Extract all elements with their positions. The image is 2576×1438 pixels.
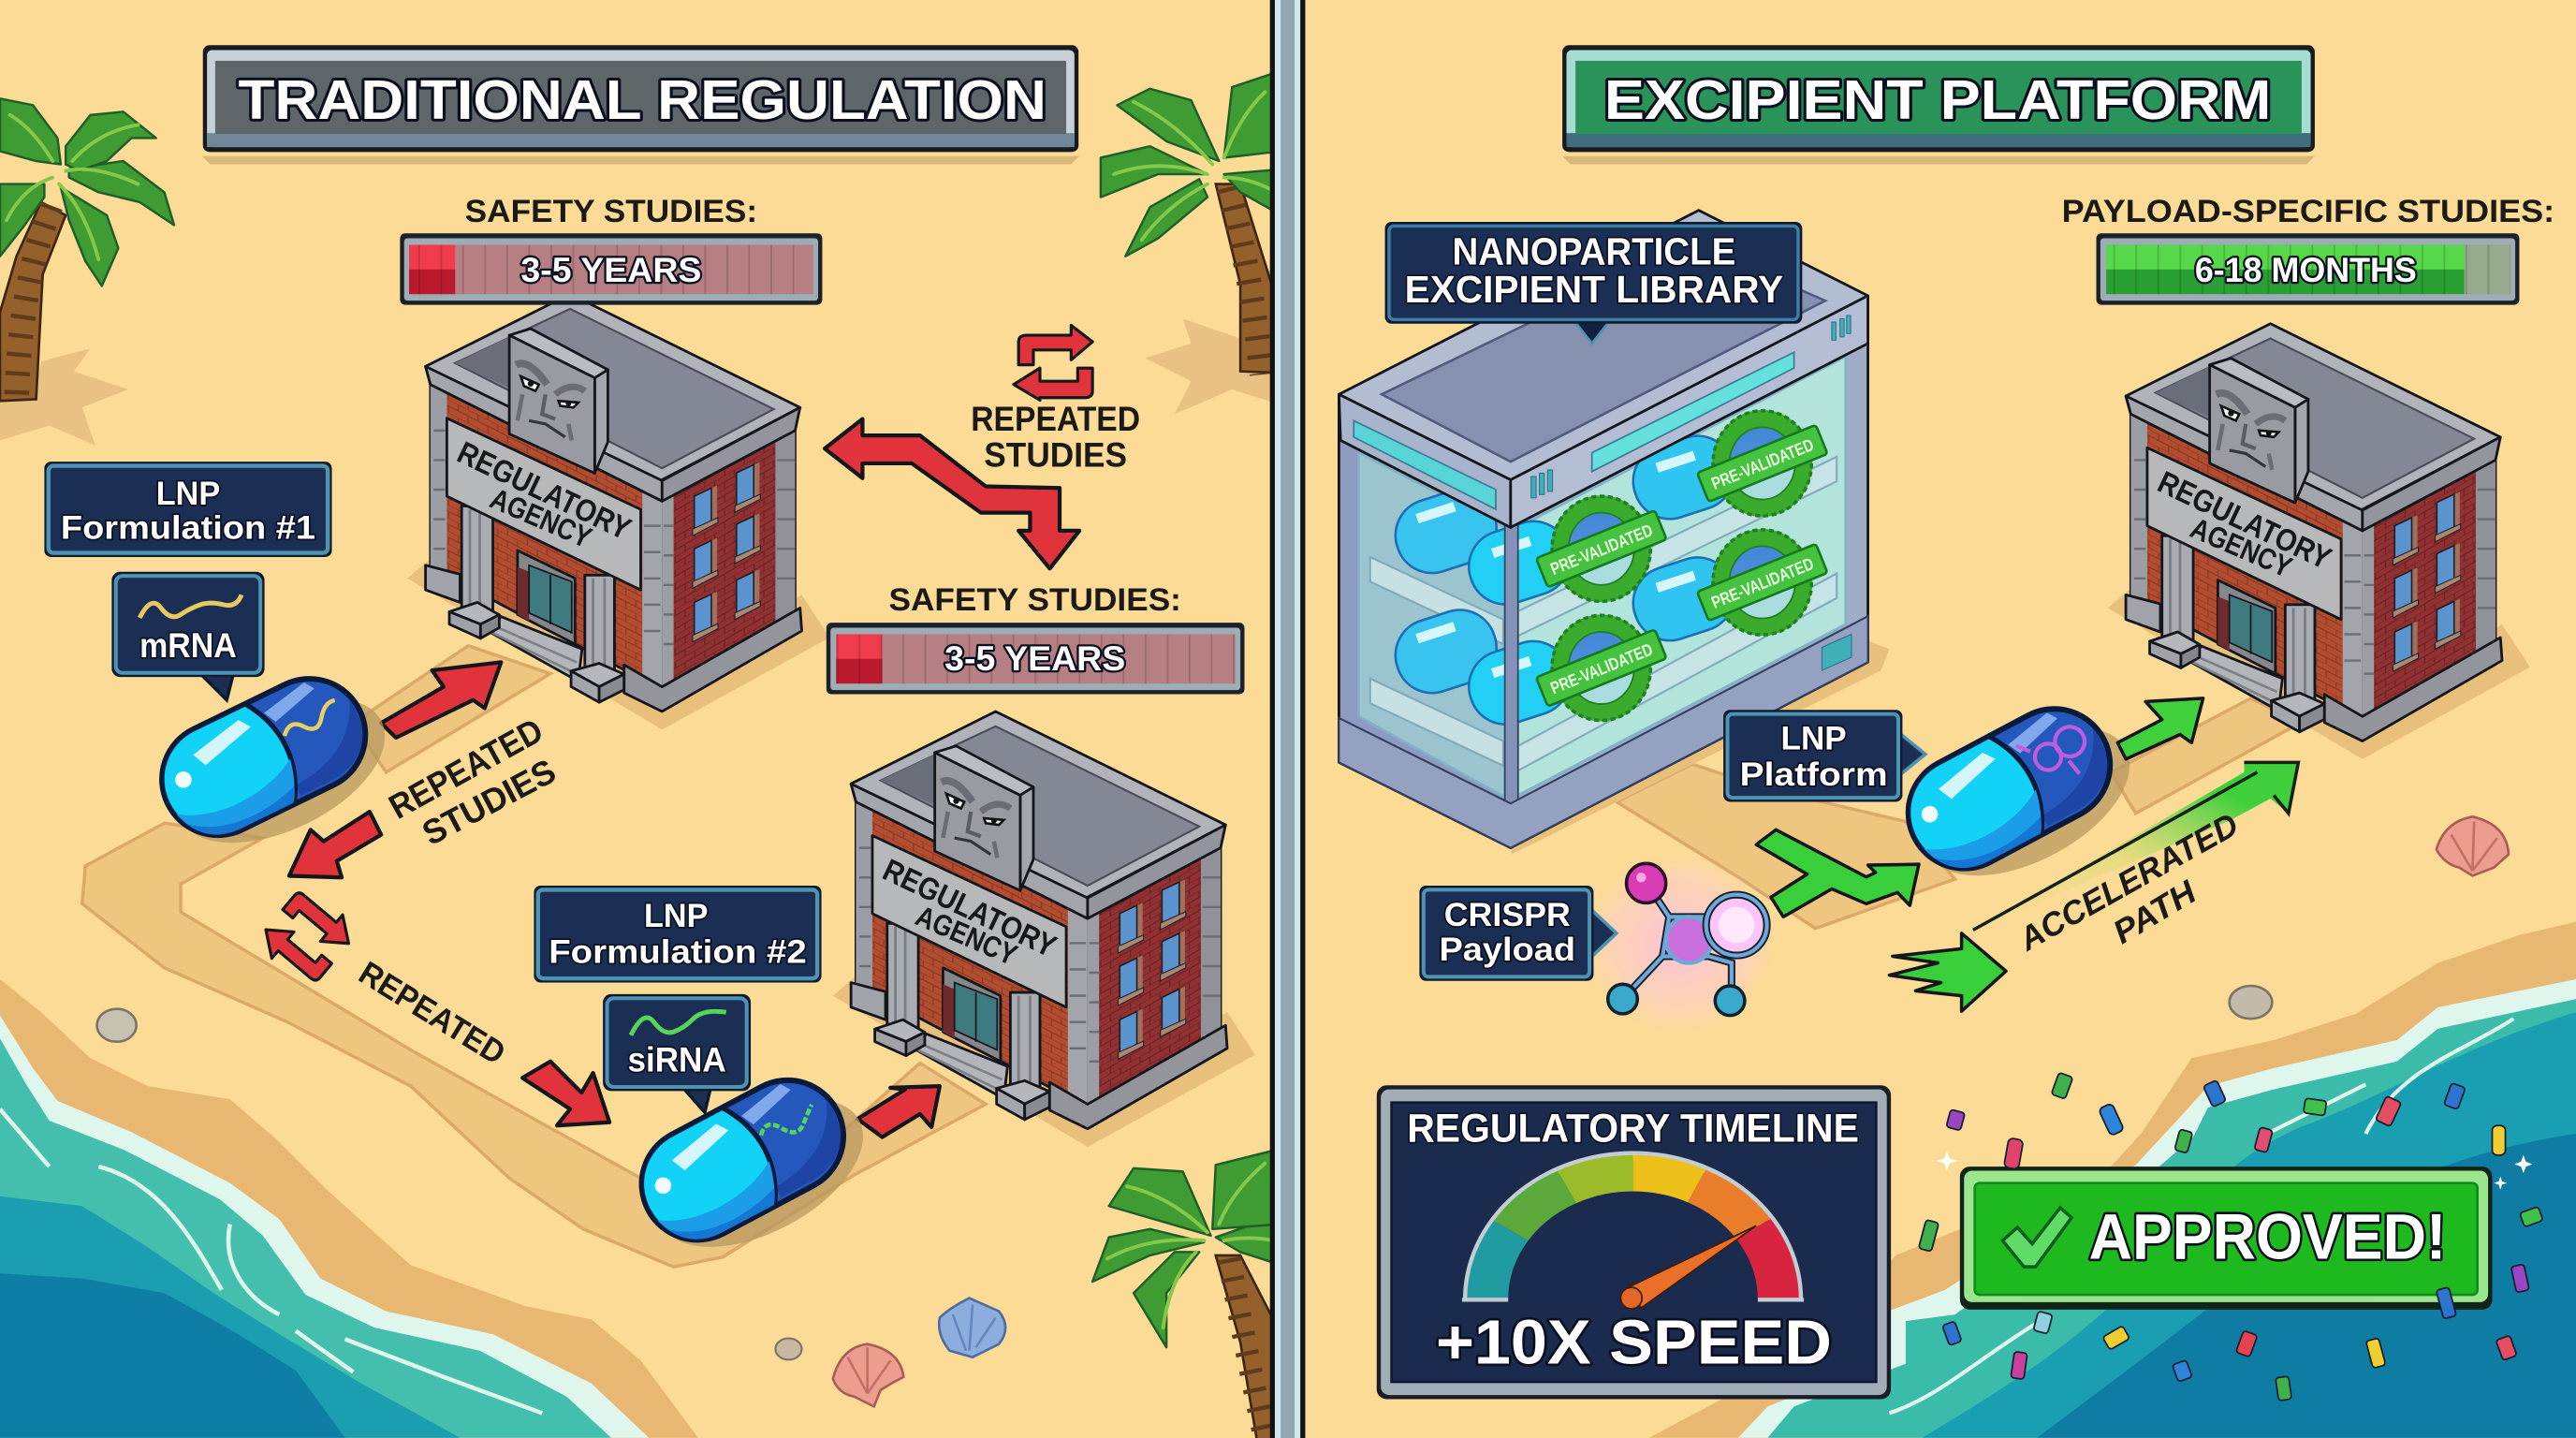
palm shadow left — [0, 348, 128, 446]
stamp: pre-validated one — [1536, 496, 1666, 601]
arrow: accelerated path — [1889, 762, 2298, 1011]
duration bar: 3-5 years top — [400, 233, 822, 305]
sand path: capsule one to agency — [353, 646, 550, 772]
stamp: pre-validated four: PRE-VALIDATED — [1547, 639, 1656, 697]
label: LNP platform — [1723, 710, 1925, 801]
label: LNP formulation two: LNP — [644, 898, 708, 934]
repeated studies label top — [971, 400, 1140, 474]
glass right pane — [1518, 357, 1846, 795]
regulatory agency building two: AGENCY — [911, 899, 1022, 972]
regulatory agency building two — [833, 712, 1255, 1147]
right ocean — [1649, 922, 2576, 1438]
duration bar: 3-5 years top: 3-5 YEARS — [520, 251, 701, 289]
bubble: mRNA — [111, 572, 265, 700]
stored capsules — [1386, 427, 1744, 734]
stamp: pre-validated three — [1697, 530, 1827, 635]
regulatory agency building three: REGULATORY — [2152, 465, 2336, 577]
gauge speed value: +10X SPEED — [1436, 1309, 1832, 1378]
label: nanoparticle excipient library: NANOPARTICLE — [1453, 230, 1735, 273]
rotated repeated studies text: STUDIES — [416, 752, 562, 853]
accelerated path text: PATH — [2107, 873, 2203, 951]
capsule three with CRISPR payload — [1889, 682, 2154, 908]
palm tree top right — [1101, 70, 1281, 374]
arrow: between agencies — [825, 419, 1079, 568]
stamp: pre-validated one: PRE-VALIDATED — [1547, 520, 1656, 579]
case fascia right — [1511, 296, 1868, 527]
button: approved — [1960, 1167, 2492, 1310]
label: LNP platform: Platform — [1740, 756, 1888, 793]
gauge heading: REGULATORY TIMELINE — [1407, 1106, 1859, 1151]
capsule one with mRNA — [143, 653, 407, 874]
teal light strip left — [1354, 420, 1496, 509]
sparkles — [1936, 1151, 2532, 1190]
shell blue — [939, 1299, 1005, 1357]
bubble: siRNA — [603, 994, 751, 1112]
stamp: pre-validated two: PRE-VALIDATED — [1708, 434, 1817, 493]
title: traditional regulation — [202, 45, 1079, 165]
panel: regulatory timeline gauge — [1377, 1085, 1891, 1399]
shell right — [2437, 816, 2509, 875]
label: LNP formulation one: Formulation #1 — [61, 510, 315, 547]
palm shadow right — [1145, 318, 1273, 414]
palm tree top left — [0, 98, 174, 401]
case left frame — [1339, 394, 1511, 848]
confetti — [1919, 1072, 2543, 1401]
duration bar: 6-18 months — [2097, 233, 2519, 305]
case fascia left — [1339, 394, 1511, 527]
left scene: beach and ocean — [0, 979, 698, 1438]
payload-specific studies label: PAYLOAD-SPECIFIC STUDIES: — [2062, 194, 2554, 229]
gauge needle — [1620, 1225, 1756, 1309]
palm tree bottom right — [1092, 1149, 1281, 1438]
bubble: mRNA: mRNA — [139, 626, 237, 665]
button: approved: APPROVED! — [2089, 1200, 2446, 1272]
label: CRISPR payload — [1419, 886, 1617, 981]
label: LNP formulation two: Formulation #2 — [549, 933, 807, 970]
pebble left — [97, 1009, 137, 1042]
glass left pane — [1358, 453, 1505, 797]
label: CRISPR payload: CRISPR — [1444, 897, 1571, 933]
gauge dial — [1462, 1155, 1804, 1299]
stamp: pre-validated two — [1697, 411, 1827, 516]
regulatory agency building one: REGULATORY — [452, 435, 636, 547]
case right frame — [1511, 296, 1868, 848]
label: LNP platform: LNP — [1781, 720, 1847, 756]
case top inset — [1382, 243, 1825, 462]
safety studies label one: SAFETY STUDIES: — [465, 194, 757, 229]
label: LNP formulation one: LNP — [156, 476, 220, 512]
regulatory agency building three: AGENCY — [2186, 511, 2297, 584]
case base shadow — [1512, 640, 1889, 855]
duration bar: 6-18 months: 6-18 MONTHS — [2195, 251, 2417, 289]
pebble right — [2230, 986, 2272, 1019]
icon: repeat arrows on path — [255, 883, 360, 990]
pebble small — [775, 1339, 801, 1359]
case vents and panel — [1531, 315, 1852, 670]
accelerated path text: ACCELERATED — [2012, 806, 2245, 959]
glass case: nanoparticle excipient library — [1339, 211, 1889, 855]
sand path: left capsule route — [82, 823, 986, 1267]
arrow: capsule to agency green — [2117, 698, 2203, 759]
title: traditional regulation: TRADITIONAL REGULATION — [238, 68, 1046, 131]
regulatory agency building three — [2108, 324, 2530, 759]
icon: CRISPR molecule — [1584, 855, 1775, 1032]
arrow: capsule two to agency — [857, 1086, 940, 1137]
case lower band — [1339, 616, 1868, 848]
repeated text on path: REPEATED — [353, 955, 511, 1072]
regulatory agency building one: AGENCY — [485, 481, 596, 554]
label: LNP formulation one — [44, 462, 332, 557]
repeated studies label top: STUDIES — [984, 435, 1127, 474]
sand path: platform route — [1617, 764, 1955, 929]
safety studies label two: SAFETY STUDIES: — [889, 582, 1181, 618]
icon: repeat arrows top — [1014, 326, 1092, 400]
case top rim — [1339, 211, 1868, 479]
rotated repeated studies text: REPEATED — [383, 711, 549, 827]
label: nanoparticle excipient library — [1385, 222, 1802, 344]
title: excipient platform — [1562, 45, 2315, 165]
bubble: siRNA: siRNA — [627, 1040, 726, 1078]
shell pink — [833, 1344, 903, 1406]
sand path: capsule three to agency — [2111, 698, 2300, 814]
icon: check mark — [2002, 1208, 2071, 1267]
arrow: path to capsule two — [522, 1062, 609, 1125]
corner pillar — [1505, 522, 1518, 805]
teal light strip right — [1592, 352, 1794, 472]
duration bar: 3-5 years lower: 3-5 YEARS — [944, 639, 1125, 678]
stamp: pre-validated four — [1536, 615, 1666, 721]
arrow: molecule and library merging to capsule — [1756, 829, 1919, 917]
duration bar: 3-5 years lower — [827, 623, 1244, 695]
arrow: back toward path — [289, 812, 381, 877]
label: CRISPR payload: Payload — [1439, 932, 1575, 968]
title: excipient platform: EXCIPIENT PLATFORM — [1604, 68, 2271, 131]
shelves — [1370, 457, 1837, 770]
regulatory agency building one — [407, 294, 829, 729]
repeated studies label top: REPEATED — [971, 400, 1140, 438]
label: nanoparticle excipient library: EXCIPIENT LIBRARY — [1405, 268, 1783, 311]
capsule two with siRNA — [622, 1053, 887, 1280]
stamp: pre-validated three: PRE-VALIDATED — [1708, 553, 1817, 612]
arrow: capsule one to agency — [381, 662, 501, 738]
centre divider — [1270, 0, 1305, 1438]
label: LNP formulation two — [534, 886, 822, 983]
regulatory agency building two: REGULATORY — [877, 853, 1061, 964]
